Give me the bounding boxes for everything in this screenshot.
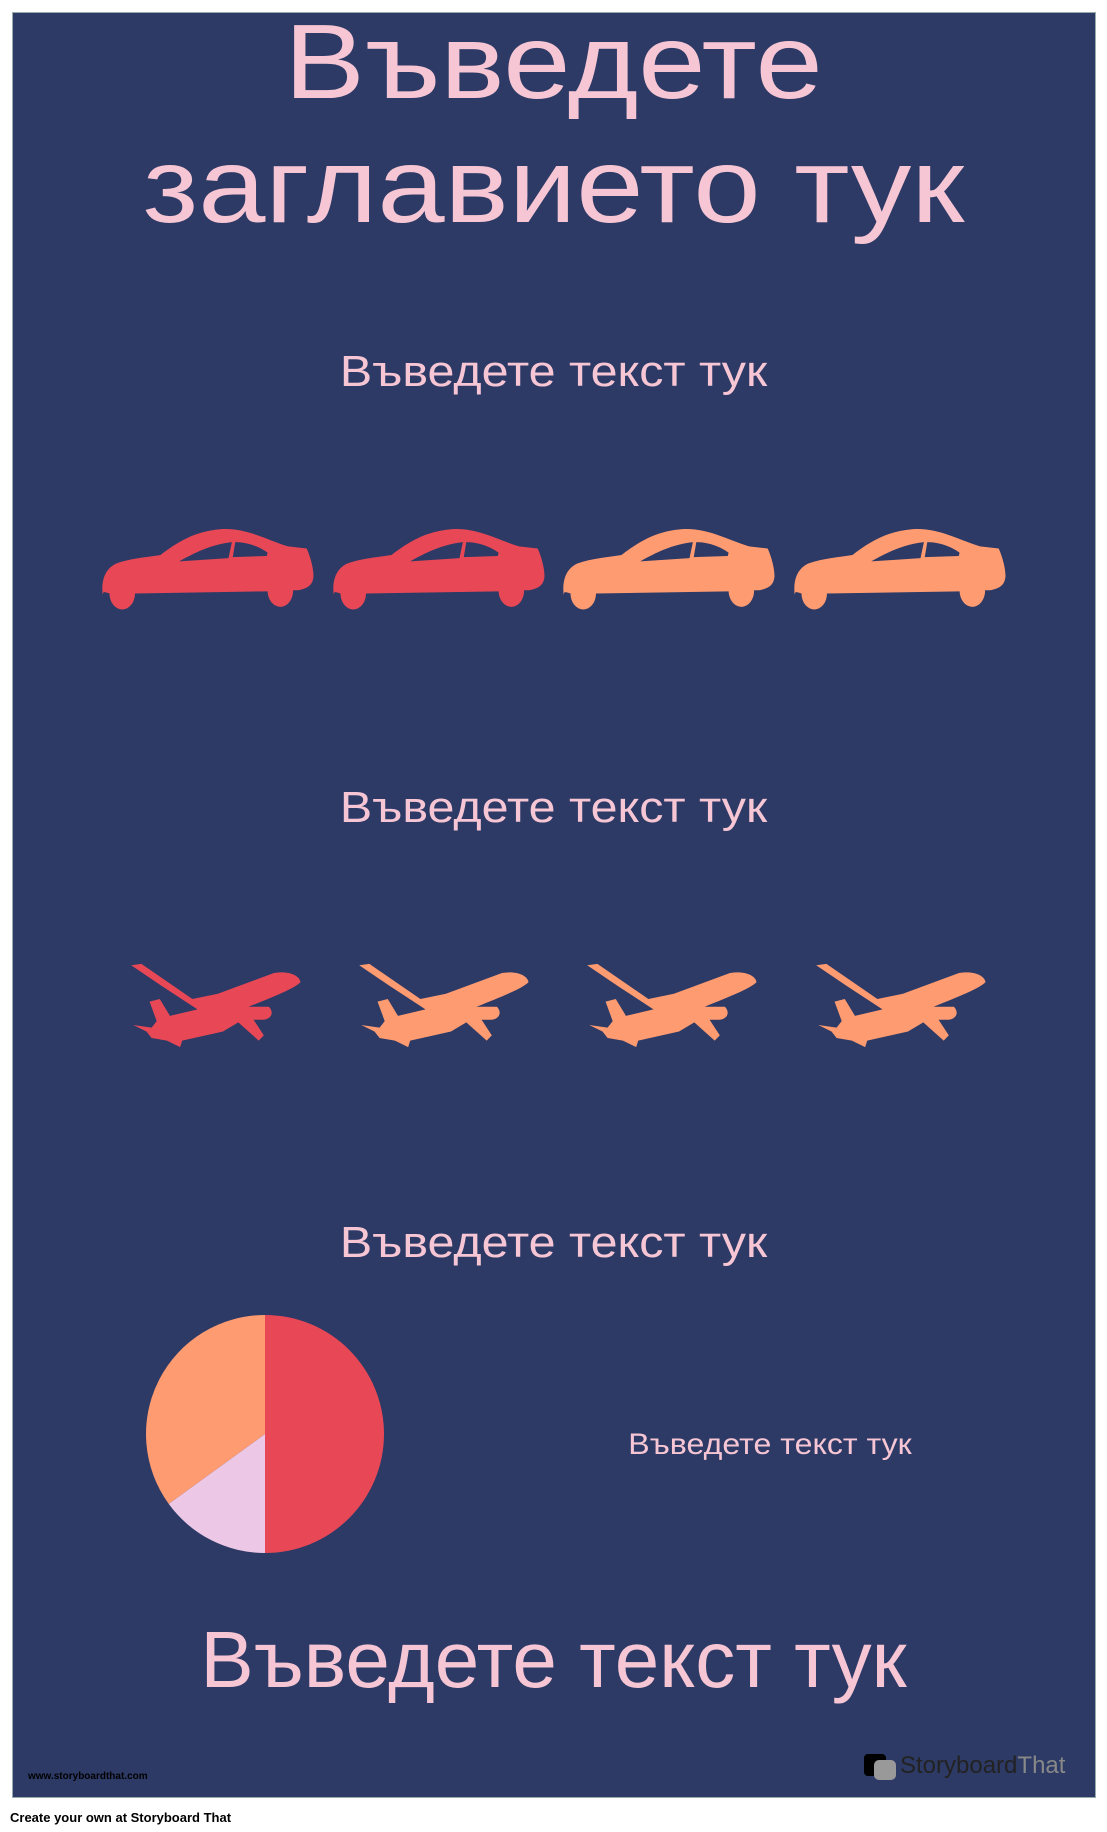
title: Въведете (284, 3, 823, 121)
heading: cars: Въведете текст тук (340, 347, 767, 396)
title (143, 3, 965, 245)
plane 1 (131, 964, 301, 1047)
footer url: www.storyboardthat.com (28, 1771, 148, 1782)
car 1 (102, 529, 313, 610)
bottom text: Въведете текст тук (200, 1615, 907, 1704)
pie chart (146, 1315, 384, 1553)
car 2 (333, 529, 544, 610)
logo: StoryboardThat (900, 1752, 1065, 1779)
cars row (102, 529, 1006, 610)
car 4 (794, 529, 1006, 610)
car 3 (563, 529, 774, 610)
heading: pie: Въведете текст тук (340, 1218, 767, 1267)
footer credit: Create your own at Storyboard That (10, 1810, 231, 1825)
plane 4 (816, 964, 986, 1047)
plane 2 (359, 964, 529, 1047)
plane 3 (587, 964, 757, 1047)
planes row (131, 964, 986, 1048)
heading: planes: Въведете текст тук (340, 783, 767, 832)
title: заглавието тук (143, 127, 964, 245)
pie caption: Въведете текст тук (628, 1428, 912, 1461)
